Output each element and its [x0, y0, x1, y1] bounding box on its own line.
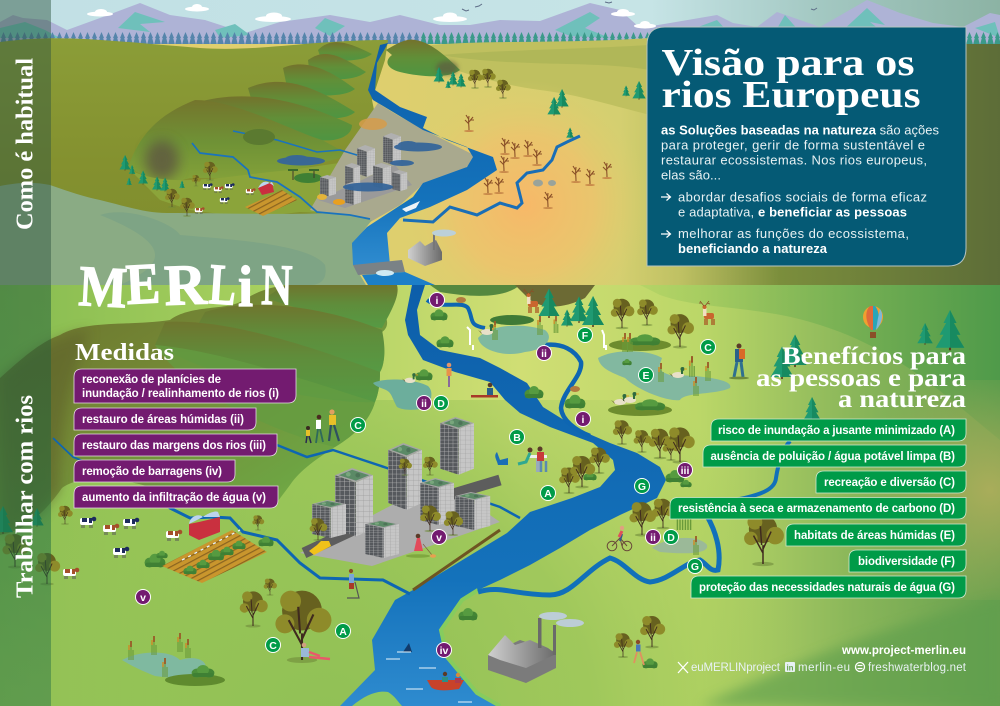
forest strip: blue [0, 32, 420, 45]
X handle: euMERLINproject [691, 662, 781, 674]
right wetland [598, 351, 730, 400]
arrow 1 [661, 194, 670, 200]
section label: Como é habitual: Como é habitual [12, 58, 38, 230]
small wetland bottom right [652, 538, 707, 553]
map markers: benefits: E [642, 370, 650, 382]
map markers: measures: iv [440, 645, 449, 657]
water tap icon [495, 452, 508, 465]
map markers: measures: v [436, 532, 442, 544]
ground bottom right [700, 600, 1000, 706]
beaver [456, 297, 580, 392]
dark strip at top of river [430, 285, 520, 296]
ground: pale fold [440, 45, 650, 70]
bullet 1: abordar desafios sociais de forma eficaz [678, 190, 927, 204]
map markers: measures: ii [650, 532, 656, 544]
benefit G [691, 576, 966, 598]
benefit C: recreação e diversão (C) [824, 477, 955, 489]
icon: LinkedIn: in [786, 664, 794, 672]
polluted city [317, 133, 412, 208]
lower left wetland [373, 379, 431, 410]
map markers: benefits: C [704, 342, 712, 354]
bottom left pond [122, 652, 206, 678]
bullet 2 line 2: beneficiando a natureza [678, 241, 828, 256]
balloon [863, 306, 883, 338]
measure 3: restauro das margens dos rios (iii) [82, 440, 266, 452]
benefit G: proteção das necessidades naturais de água (G) [699, 582, 955, 594]
benefit D: resistência à seca e armazenamento de carbono (D) [678, 503, 955, 515]
farm: crop field [162, 530, 267, 583]
heading: Visão para os [662, 42, 914, 84]
benefit F: biodiversidade (F) [858, 556, 955, 568]
forest strip: teal [420, 32, 1000, 45]
measure 4: remoção de barragens (iv) [82, 466, 222, 478]
green bank rim [441, 590, 500, 706]
base green meadow [130, 160, 372, 218]
family walking [306, 409, 339, 443]
logo: MERLiN: R [163, 252, 209, 318]
footer links [678, 645, 967, 674]
palms and shrubs [288, 170, 322, 183]
upper wetland [478, 326, 549, 354]
cows [63, 517, 182, 579]
hill lobes [155, 285, 398, 447]
panel: current situation scene [0, 0, 1000, 285]
benefit E [786, 524, 966, 546]
map markers: measures: iii [681, 465, 689, 477]
stream 2 [233, 131, 367, 158]
stream i to river [545, 345, 590, 436]
blog address: freshwaterblog.net [868, 662, 967, 674]
map markers: benefits: A [339, 626, 347, 638]
measure 2: restauro de áreas húmidas (ii) [82, 414, 244, 426]
left band: with rivers [0, 285, 51, 706]
ground right warm [850, 380, 1000, 600]
streams on the hill [192, 143, 370, 219]
map markers: benefits: C [269, 640, 277, 652]
trees [2, 299, 784, 663]
rocks [533, 180, 556, 186]
map markers: benefits: C [354, 420, 362, 432]
ground: green right slope [400, 38, 650, 115]
fog bottom left [0, 183, 372, 285]
website: www.project-merlin.eu [841, 645, 966, 657]
map markers: benefits: F [582, 330, 589, 342]
whale tail [403, 643, 412, 652]
river bank [413, 530, 500, 590]
ground [0, 285, 1000, 706]
dry riverbed [310, 103, 474, 225]
measure 5: aumento da infiltração de água (v) [82, 492, 266, 504]
canoe [427, 672, 464, 690]
arrow 2 [661, 230, 670, 238]
bullet 1 line 2: e adaptativa, e beneficiar as pessoas [678, 204, 907, 220]
large hill [0, 285, 397, 535]
road [304, 480, 500, 553]
measure 4 [74, 460, 235, 482]
ducks and herons [402, 324, 687, 405]
benefit D [670, 498, 966, 519]
farm: barn [189, 512, 220, 540]
fog darker blobs [100, 212, 326, 285]
benefit E: habitats de áreas húmidas (E) [794, 530, 955, 542]
heading line 2: rios Europeus [662, 74, 920, 116]
logo: MERLiN: M [77, 253, 129, 320]
dead forest patch [243, 129, 275, 145]
dark bank bushes [165, 315, 672, 686]
map markers: benefits: D [667, 532, 675, 544]
forest base [0, 44, 1000, 60]
dam [353, 260, 405, 275]
yellow car [309, 541, 331, 555]
pines [120, 67, 646, 191]
map markers: benefits: B [513, 432, 521, 444]
cyclist [607, 526, 632, 551]
icon: blog [856, 662, 864, 672]
cows [195, 183, 256, 214]
section label: Trabalhar com rios: Trabalhar com rios [12, 395, 38, 598]
heading line 2: as pessoas e para [756, 365, 967, 392]
map markers: measures: ii [421, 398, 427, 410]
upper right branch [735, 441, 790, 500]
hill dark left shadow [0, 330, 90, 535]
bottom land bump [352, 692, 402, 706]
map markers: benefits: A [544, 488, 552, 500]
yoga person and bench [446, 363, 498, 398]
reeds [128, 316, 710, 677]
dry trees [464, 115, 612, 209]
family at fountain [518, 446, 547, 472]
panel background [647, 27, 966, 266]
city base plate [300, 480, 500, 566]
bushes [145, 309, 692, 668]
measure 1 [74, 369, 296, 403]
panel: vision text [647, 27, 966, 266]
benefit C [816, 471, 966, 493]
crop field [245, 190, 297, 216]
ground: left olive slopes [0, 38, 388, 285]
bottom factory [488, 612, 584, 683]
intro line 4: elas são... [661, 168, 721, 182]
logo: MERLiN: L [207, 251, 239, 318]
sky [0, 0, 1000, 60]
left band: current situation [0, 0, 51, 285]
benefit B: ausência de poluição / água potável limpa (B) [710, 451, 955, 463]
intro text: as Soluções baseadas na natureza são ações [661, 122, 940, 138]
map markers: benefits: G [691, 561, 699, 573]
map markers: benefits: D [437, 398, 445, 410]
measure 5 [74, 486, 278, 508]
map markers: measures: i [436, 295, 439, 307]
panel: measures [74, 340, 296, 508]
bullet 2: melhorar as funções do ecossistema, [678, 226, 909, 241]
birds [462, 2, 817, 11]
barn [258, 182, 274, 195]
ridge far lobes [188, 42, 372, 140]
map markers: measures: i [582, 414, 585, 426]
measure 1: inundação / realinhamento de rios (i) [82, 388, 279, 400]
measure 3 [74, 434, 277, 456]
map markers: measures [136, 292, 692, 658]
pines [0, 288, 964, 534]
dry patch [359, 118, 387, 130]
top river [352, 43, 497, 265]
dry stream [403, 136, 580, 222]
mountains [0, 0, 1000, 60]
measure 2 [74, 408, 256, 430]
heading: Medidas: Medidas [75, 340, 174, 366]
logo: MERLiN: i [238, 254, 253, 319]
city stream [277, 445, 520, 518]
panel: working with rivers scene [0, 285, 1000, 706]
hiker with camera [729, 344, 749, 379]
panel: benefits [670, 343, 967, 598]
second hill [386, 40, 460, 76]
ground base [0, 44, 1000, 285]
ridge: rock shadow [145, 140, 179, 180]
map markers: measures: v [140, 592, 146, 604]
intro line 2: para proteger, gerir de forma sustentável e [661, 138, 925, 152]
clouds [87, 4, 656, 28]
left stream [53, 438, 105, 470]
ground lower shade [0, 400, 810, 706]
benefit A: risco de inundação a jusante minimizado (A) [718, 425, 955, 437]
small top stream [427, 300, 485, 328]
woman with dog [406, 534, 436, 558]
LinkedIn handle: merlin-eu [798, 662, 850, 674]
icon: X [678, 662, 688, 673]
branch: lower river [478, 516, 719, 595]
intro line 3: restaurar ecossistemas. Nos rios europeus, [661, 152, 927, 168]
boat [402, 201, 420, 212]
benefit A [711, 419, 966, 441]
sustainable city [300, 417, 500, 566]
water ripples [386, 652, 472, 702]
benefit B [703, 445, 966, 467]
water below dam [362, 272, 435, 285]
main river [340, 285, 666, 706]
ground: dry orange plain [380, 60, 650, 285]
farm stream [160, 497, 410, 594]
crop bushes [183, 541, 246, 574]
person under tree [301, 643, 330, 659]
factory [408, 230, 456, 266]
irrigation [182, 530, 240, 560]
rock hill top right of river [515, 285, 595, 307]
icon: LinkedIn [785, 662, 795, 672]
heading line 1: Benefícios para [782, 343, 967, 370]
runner [634, 640, 644, 665]
trees [165, 69, 511, 217]
ground top right darker green [640, 285, 1000, 440]
deer [523, 289, 714, 325]
logo: MERLiN [77, 250, 293, 320]
map markers: measures: ii [541, 348, 547, 360]
smog clouds [277, 141, 442, 192]
heading line 3: a natureza [838, 386, 967, 413]
mountain teal shading [0, 8, 1000, 38]
map markers: benefits: G [638, 481, 646, 493]
measure 1: reconexão de planícies de [82, 374, 221, 386]
benefit F [849, 550, 966, 572]
scooter rider [347, 569, 359, 598]
dam spill [376, 270, 394, 276]
logo: MERLiN: E [124, 250, 162, 317]
hill rock shadow [436, 61, 458, 75]
city trees [310, 457, 463, 541]
map markers: benefits [266, 328, 716, 652]
ridge main [128, 100, 350, 185]
logo: MERLiN: N [261, 252, 293, 318]
